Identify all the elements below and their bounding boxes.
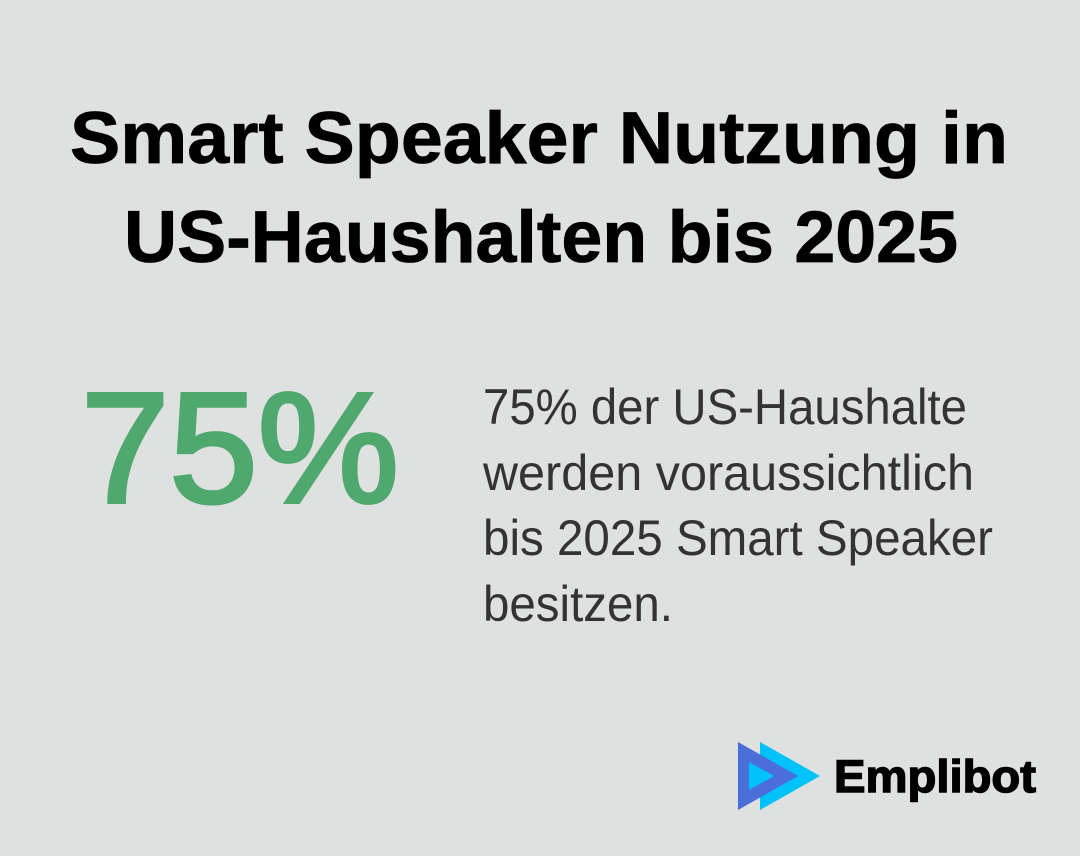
title: Smart Speaker Nutzung in (70, 98, 1008, 179)
logo: Emplibot (738, 742, 1036, 810)
description text: werden voraussichtlich (482, 445, 974, 501)
icon: play triangles (738, 742, 820, 810)
description text: besitzen. (483, 576, 673, 632)
logo wordmark: Emplibot (834, 751, 1036, 802)
title: US-Haushalten bis 2025 (124, 197, 958, 278)
description text: 75% der US-Haushalte (483, 379, 967, 435)
description text (482, 379, 993, 632)
big statistic: 75%: 75% (81, 361, 399, 536)
title (70, 98, 1008, 278)
description text: bis 2025 Smart Speaker (483, 510, 993, 566)
